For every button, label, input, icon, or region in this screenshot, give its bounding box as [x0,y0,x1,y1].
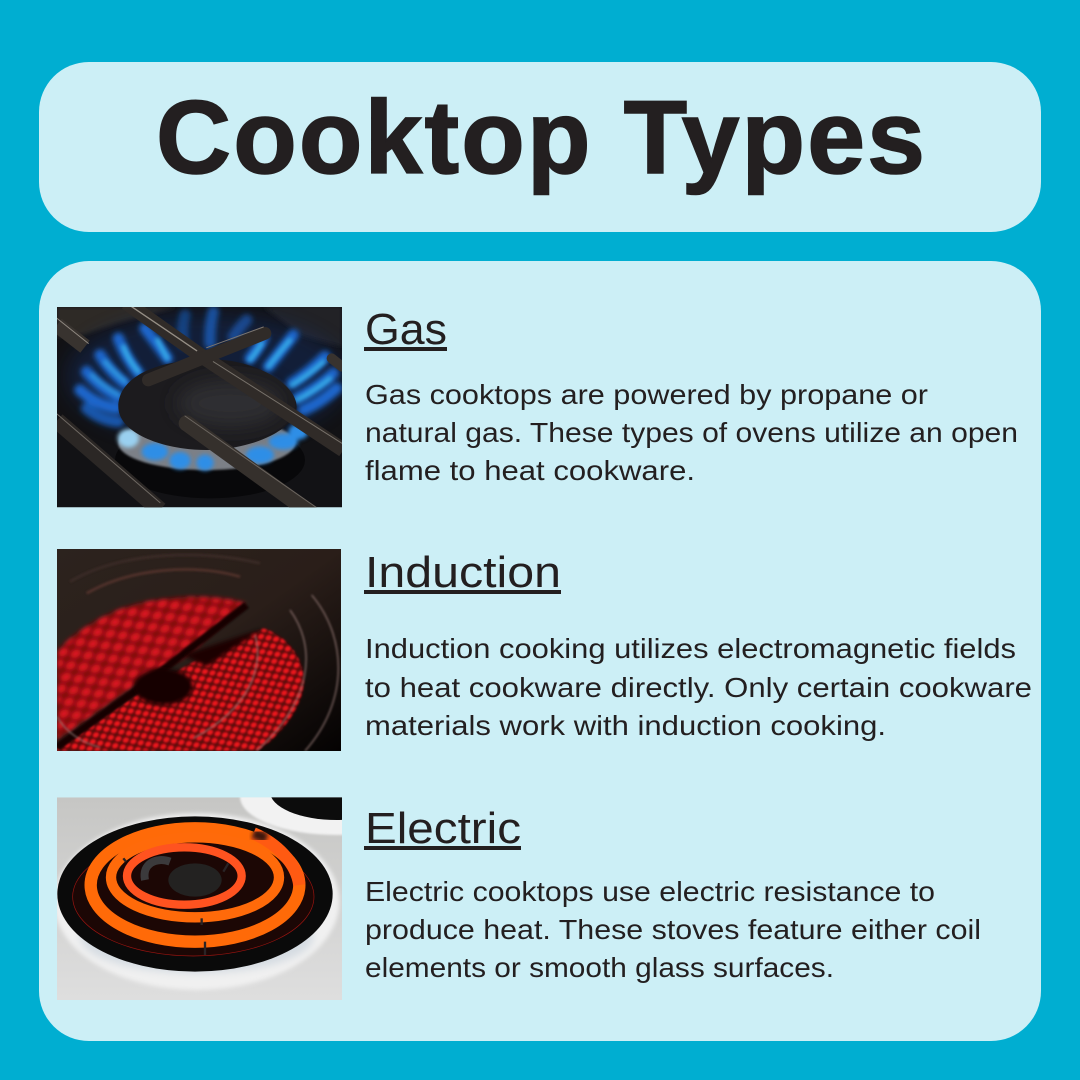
text: induction [364,548,1032,741]
white drip pan rim [54,813,339,990]
description: gas: Gas cooktops are powered by propane or [365,379,928,410]
neighbouring burner [239,797,342,836]
lower blue flame ring [118,424,308,471]
grate bars [57,303,343,515]
description: electric: Electric cooktops use electric resistance to [365,876,935,907]
burner cap [118,359,297,450]
black ring [57,816,333,972]
coil supports [123,858,228,955]
lower heated zone [57,628,304,751]
description: gas: flame to heat cookware. [365,455,695,486]
thin arcs [57,595,338,751]
coil rings [91,828,299,942]
text: gas [364,305,1018,486]
title banner [39,62,1041,232]
description: induction: Induction cooking utilizes electromagnetic fields [365,633,1016,664]
blue flames [80,312,337,422]
heading: electric: Electric [365,804,521,853]
description: electric: elements or smooth glass surfaces. [365,952,834,983]
description: gas: natural gas. These types of ovens utilize an open [365,417,1018,448]
description: induction: to heat cookware directly. Only certain cookware [365,672,1032,703]
description: gas [365,379,1018,486]
photo: electric coil [57,797,342,1000]
centre disc [168,863,222,897]
heading: gas: Gas [365,305,447,354]
dark slit [57,605,247,747]
description: electric: produce heat. These stoves feature either coil [365,914,981,945]
text: electric [364,804,981,983]
photo: gas burner [57,303,347,515]
description: induction [365,633,1032,741]
title: Cooktop Types [156,80,925,196]
photo: induction hob [57,549,341,751]
burner base [115,446,305,498]
description: electric [365,876,981,983]
description: induction: materials work with induction cooking. [365,710,886,741]
heading: induction: Induction [365,548,561,597]
upper heated zone [57,597,245,740]
panel: cooktop types [39,261,1041,1041]
